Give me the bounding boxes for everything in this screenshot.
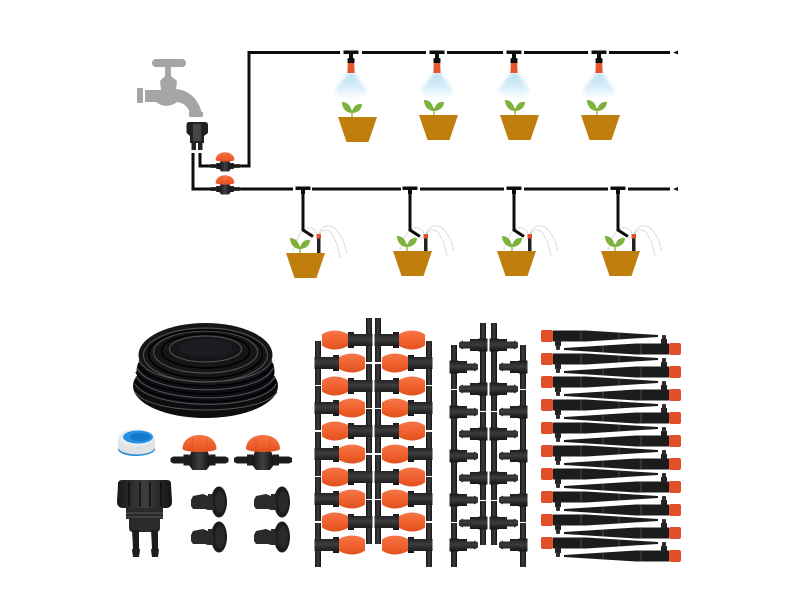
icon: end plug 2 xyxy=(254,486,290,518)
panel: irrigation diagram xyxy=(137,50,678,278)
icon: upper line valve xyxy=(209,152,241,172)
mist station 3 xyxy=(498,50,539,140)
mist station 2 xyxy=(419,50,458,140)
icon: sealing tape roll xyxy=(118,430,155,456)
orange micro sprinklers xyxy=(314,318,432,567)
icon: tap adapter xyxy=(117,480,172,557)
mist station 4 xyxy=(581,50,620,140)
panel: kit parts xyxy=(117,318,681,567)
lower pipe line xyxy=(192,153,678,191)
icon: grey water tap xyxy=(137,59,203,117)
drip station 1 xyxy=(286,186,347,278)
icon: end plug 1 xyxy=(191,486,227,518)
icon: end plug 3 xyxy=(191,522,227,552)
black tee fittings xyxy=(450,323,528,567)
icon: tap connector xyxy=(186,122,208,150)
drip station 3 xyxy=(497,186,558,276)
drip stakes xyxy=(541,330,681,562)
icon: shut-off valve 2 xyxy=(234,435,292,470)
icon: shut-off valve 1 xyxy=(170,435,228,470)
hose coil xyxy=(133,323,278,418)
drip station 2 xyxy=(393,186,454,276)
drip station 4 xyxy=(601,186,662,276)
icon: end plug 4 xyxy=(254,522,290,552)
icon: lower line valve xyxy=(209,175,241,194)
upper pipe line xyxy=(198,50,678,168)
mist station 1 xyxy=(335,50,377,142)
